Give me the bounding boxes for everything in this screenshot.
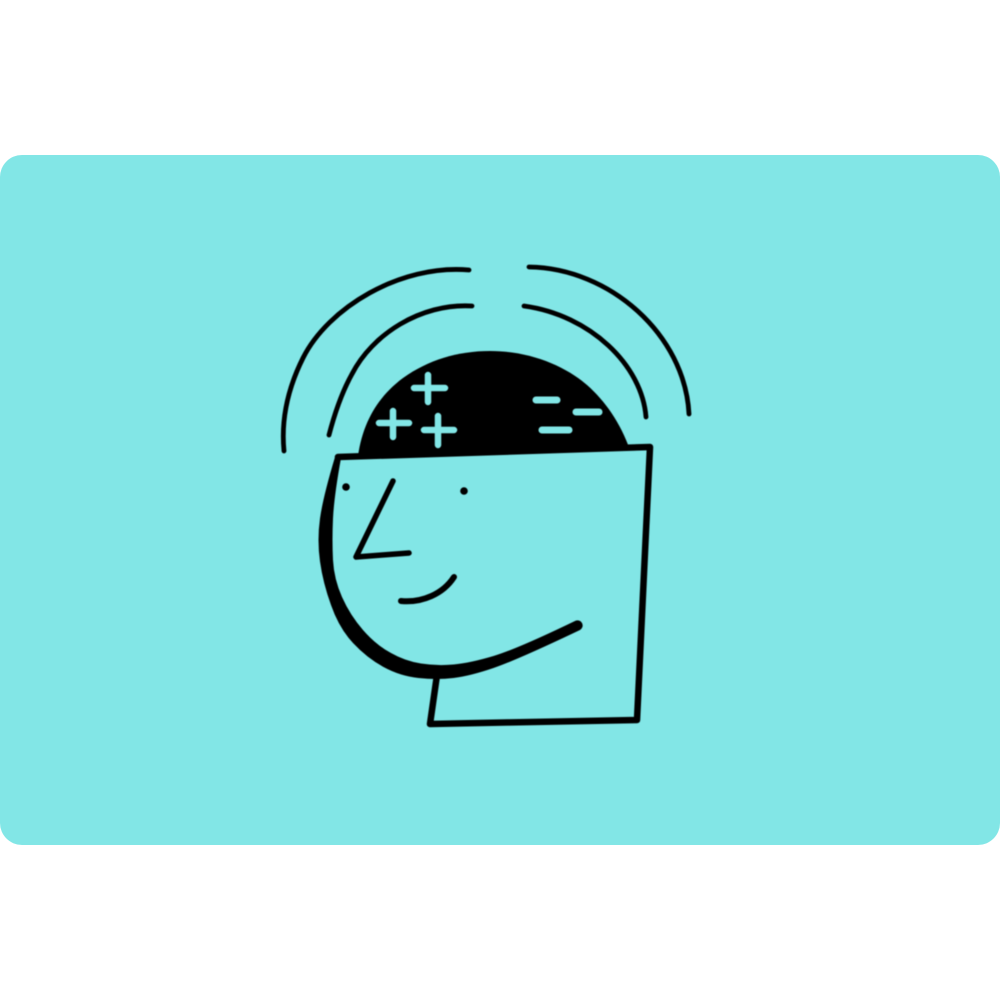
icon: jaw line bbox=[318, 457, 583, 679]
icon: eyes bbox=[342, 483, 468, 495]
panel: turquoise background bbox=[0, 155, 1000, 845]
icon: plus signs bbox=[379, 375, 454, 445]
icon: head outline bbox=[338, 447, 650, 724]
icon: brain dome bbox=[358, 351, 630, 456]
icon: head drawing bbox=[283, 267, 689, 724]
icon: minus signs bbox=[536, 400, 599, 430]
icon: nose bbox=[356, 481, 409, 557]
icon: mouth bbox=[401, 577, 454, 601]
icon: signal arcs bbox=[283, 267, 689, 451]
